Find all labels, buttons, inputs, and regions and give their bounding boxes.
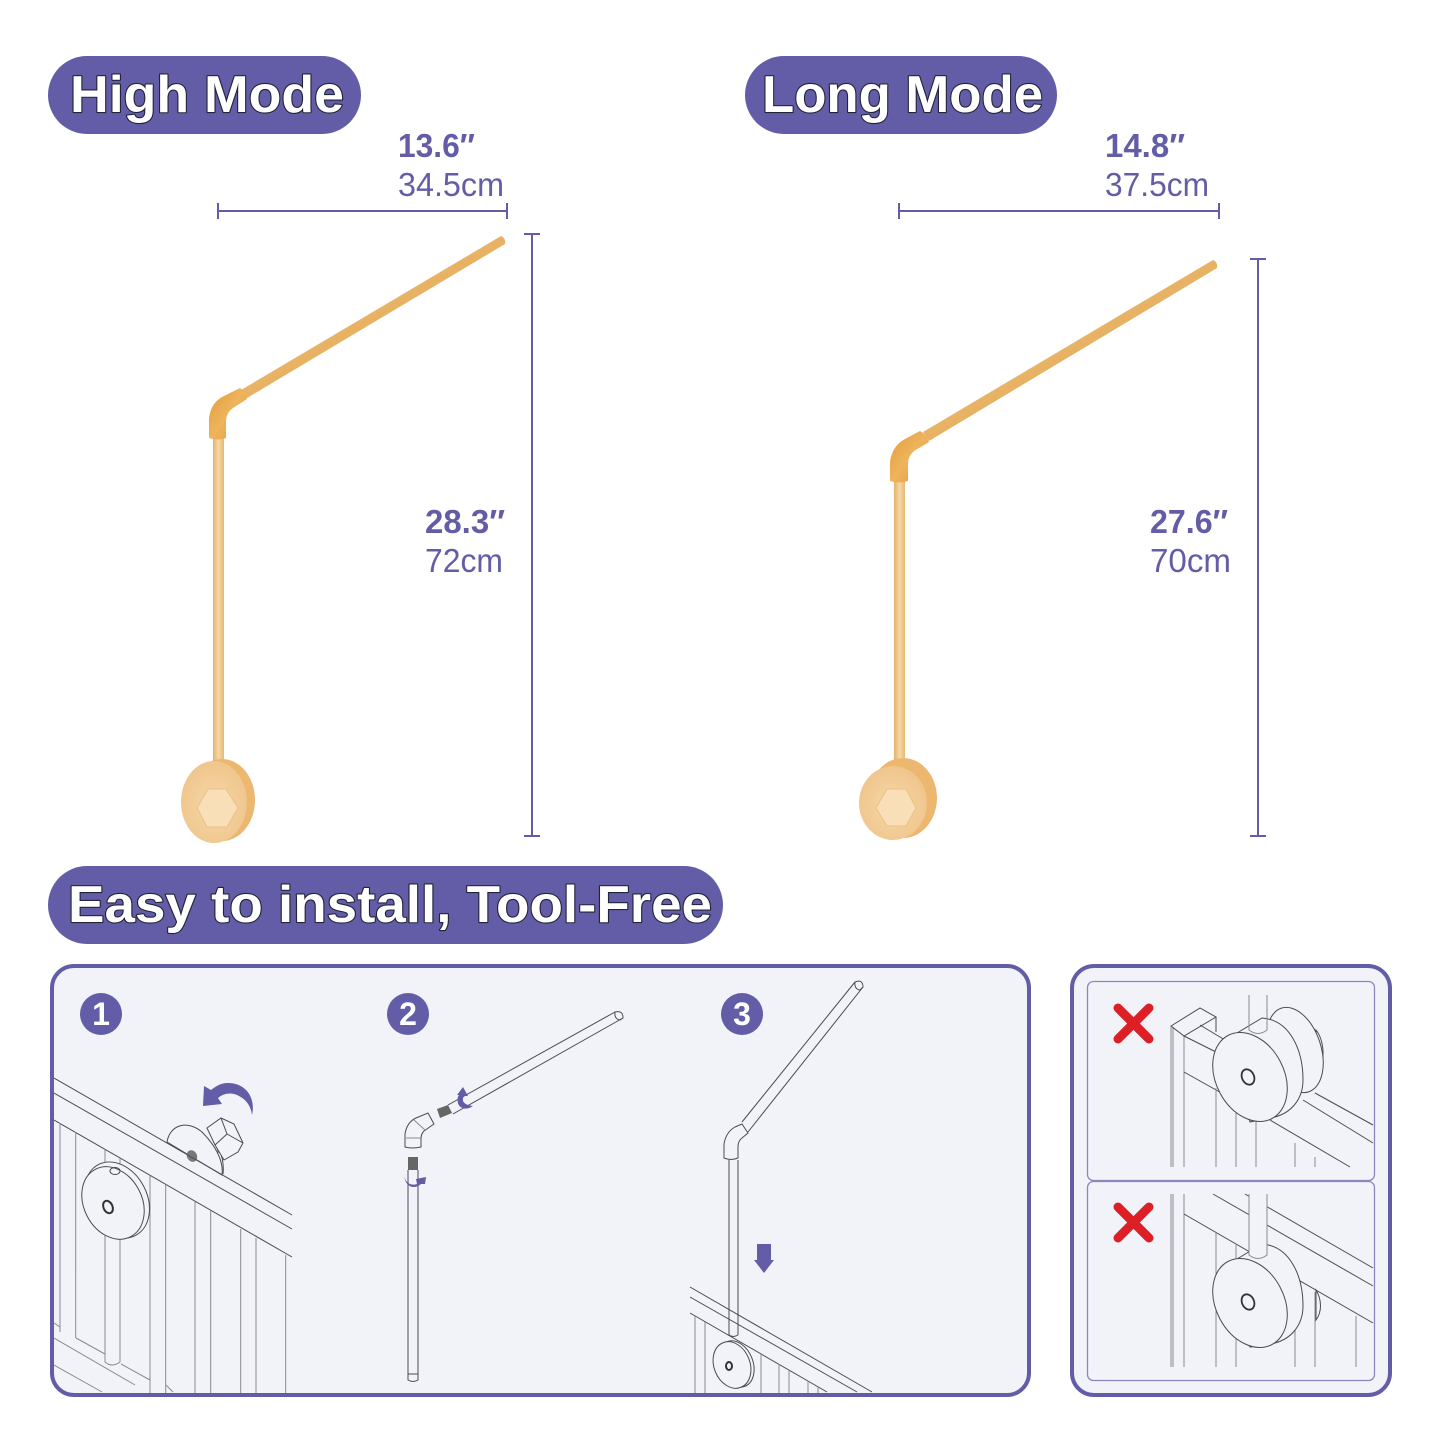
panel: installation steps xyxy=(52,966,1029,1395)
heading: Long Mode xyxy=(745,56,1057,134)
height label: long mode: 27.6″ xyxy=(1150,503,1228,540)
step 2 rotate arrow: vertical rod xyxy=(404,1175,426,1187)
panel: incorrect installations xyxy=(1072,966,1390,1395)
width label: long mode xyxy=(1105,127,1209,203)
height label: long mode xyxy=(1150,503,1231,579)
width dimension line: long mode xyxy=(899,203,1219,219)
step 3 down arrow xyxy=(754,1244,774,1273)
heading: High Mode: High Mode xyxy=(70,66,344,124)
step 2 exploded arm illustration xyxy=(405,1012,623,1382)
width label: high mode: 13.6″ xyxy=(398,127,475,164)
sub-panel: wrong position at post xyxy=(1088,982,1374,1180)
height label: long mode: 70cm xyxy=(1150,542,1231,579)
step 3 assembled arm on crib illustration xyxy=(690,981,872,1395)
wooden mobile arm: high mode xyxy=(181,236,505,843)
width label: long mode: 14.8″ xyxy=(1105,127,1185,164)
height dimension line: long mode xyxy=(1250,259,1266,836)
width label: high mode xyxy=(398,127,504,203)
sub-panel: wrong position below rail xyxy=(1088,1182,1374,1380)
mounting disk xyxy=(81,1150,150,1366)
width label: long mode: 37.5cm xyxy=(1105,166,1209,203)
red cross xyxy=(1118,1008,1149,1039)
rail and post drawing xyxy=(1171,1194,1373,1367)
step 1 number: 1 xyxy=(92,996,110,1032)
step 1 crib rail illustration xyxy=(54,1078,292,1395)
step 2 number: 2 xyxy=(399,996,417,1032)
heading: Easy to install, Tool-Free: Easy to install, Tool-Free xyxy=(68,876,712,934)
rail and post drawing xyxy=(1171,995,1373,1167)
step 2 rotate arrow: horizontal arm xyxy=(457,1087,473,1109)
step 3 number xyxy=(721,993,763,1035)
wooden mobile arm: long mode xyxy=(859,260,1217,840)
step 3 number: 3 xyxy=(733,996,751,1032)
red cross xyxy=(1118,1207,1149,1238)
heading: Easy to install, Tool-Free xyxy=(48,866,723,944)
heading: High Mode xyxy=(48,56,361,134)
height label: high mode: 72cm xyxy=(425,542,503,579)
height label: high mode: 28.3″ xyxy=(425,503,505,540)
back plate and bolt xyxy=(167,1118,243,1175)
step 1 number xyxy=(80,993,122,1035)
width label: high mode: 34.5cm xyxy=(398,166,504,203)
height dimension line: high mode xyxy=(524,234,540,836)
heading: Long Mode: Long Mode xyxy=(762,66,1043,124)
width dimension line: high mode xyxy=(218,203,507,219)
step 1 rotate arrow xyxy=(203,1083,253,1115)
step 2 number xyxy=(387,993,429,1035)
height label: high mode xyxy=(425,503,505,579)
